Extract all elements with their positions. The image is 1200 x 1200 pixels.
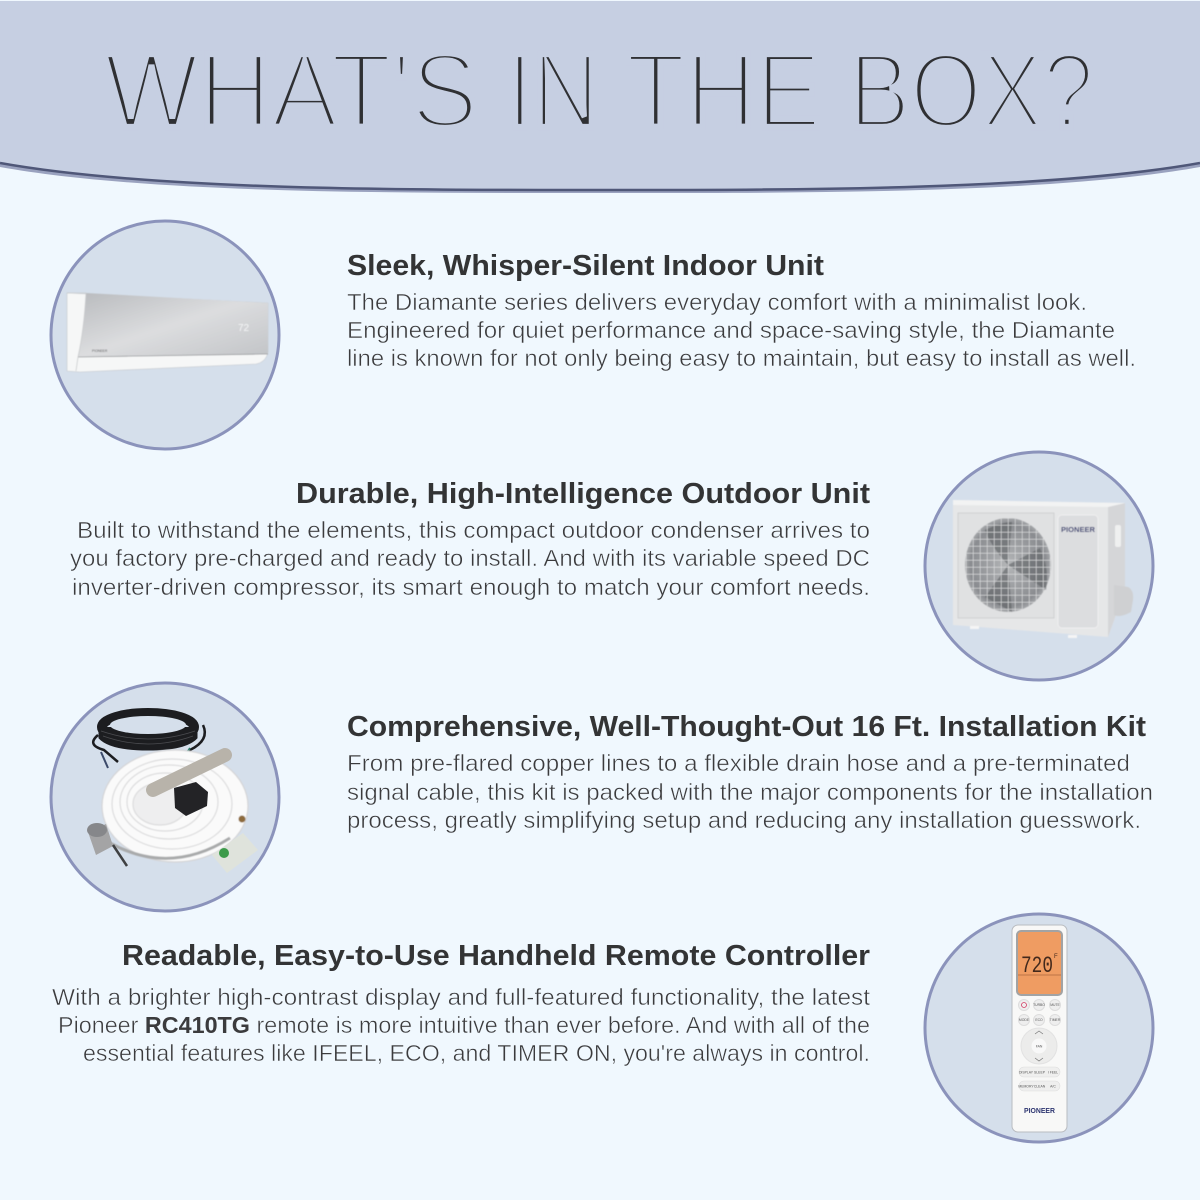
text block: remote controller: [52, 984, 870, 1066]
icon: indoor unit: PIONEER: [92, 349, 108, 353]
icon: grey wall sleeve: [153, 755, 225, 790]
icon: outdoor condenser: PIONEER: [1061, 525, 1096, 534]
icon: remote controller: FAN: [1036, 1044, 1043, 1048]
title: IN: [507, 32, 599, 150]
header banner: [0, 1, 1200, 193]
text block: installation kit: signal cable, this kit is packed with the major components for the installation: [347, 779, 1153, 805]
icon: remote controller: A/C: [1050, 1084, 1056, 1088]
text block: outdoor unit: you factory pre-charged and ready to install. And with its variable speed DC: [70, 545, 870, 571]
icon: indoor unit: [67, 293, 268, 372]
icon: remote controller: ECO: [1035, 1018, 1043, 1022]
title: THE: [626, 32, 821, 150]
icon: outdoor condenser: [953, 500, 1133, 638]
icon: remote controller: DISPLAY: [1019, 1070, 1034, 1074]
text block: remote controller: essential features like IFEEL, ECO, and TIMER ON, you're always in control.: [83, 1040, 870, 1066]
heading: outdoor unit: Durable, High-Intelligence Outdoor Unit: [296, 478, 871, 510]
text block: outdoor unit: inverter-driven compressor, its smart enough to match your comfort needs.: [72, 574, 870, 600]
panel: installation kit image: [51, 683, 279, 911]
text block: indoor unit: [347, 289, 1136, 371]
icon: remote controller: MEMORY: [1018, 1084, 1034, 1088]
icon: remote controller: PIONEER: [1024, 1108, 1055, 1115]
icon: black signal cable coil: [93, 713, 205, 768]
panel: indoor unit image: [51, 221, 279, 449]
icon: remote controller: [1012, 925, 1067, 1132]
icon: indoor unit: 72: [238, 323, 250, 334]
text block: remote controller: Pioneer RC410TG remote is more intuitive than ever before. And with all of the: [58, 1012, 870, 1038]
text block: installation kit: From pre-flared copper lines to a flexible drain hose and a pre-terminated: [347, 750, 1130, 776]
icon: remote controller: CLEAN: [1034, 1084, 1046, 1088]
icon: white insulated line set: [102, 750, 248, 862]
heading: remote controller: Readable, Easy-to-Use Handheld Remote Controller: [122, 940, 870, 972]
panel: outdoor unit image: [925, 452, 1153, 680]
text block: remote controller: With a brighter high-contrast display and full-featured functionality, the latest: [52, 984, 870, 1010]
panel: remote image: [925, 914, 1153, 1142]
title: [104, 32, 1094, 150]
icon: remote controller: MODE: [1019, 1018, 1030, 1022]
text block: outdoor unit: Built to withstand the elements, this compact outdoor condenser arrives to: [77, 517, 870, 543]
icon: black foam block: [174, 782, 208, 816]
heading: installation kit: Comprehensive, Well-Thought-Out 16 Ft. Installation Kit: [347, 711, 1147, 743]
icon: accessory packet: [212, 833, 258, 873]
icon: remote controller: F: [1054, 954, 1058, 960]
icon: grey tape roll: [87, 823, 127, 866]
text block: installation kit: [347, 750, 1153, 833]
icon: remote controller: TIMER: [1050, 1018, 1061, 1022]
icon: remote controller: 720: [1021, 953, 1053, 979]
icon: remote controller: MUTE: [1050, 1003, 1061, 1007]
title: BOX?: [849, 32, 1094, 150]
icon: remote controller: I FEEL: [1048, 1070, 1058, 1074]
icon: remote controller: TURBO: [1033, 1003, 1045, 1007]
text block: indoor unit: line is known for not only being easy to maintain, but easy to install as well.: [347, 345, 1136, 371]
heading: indoor unit: Sleek, Whisper-Silent Indoor Unit: [347, 250, 825, 282]
title: WHAT'S: [104, 32, 478, 150]
text block: outdoor unit: [70, 517, 870, 600]
text block: indoor unit: Engineered for quiet performance and space-saving style, the Diamante: [347, 317, 1115, 343]
text block: installation kit: process, greatly simplifying setup and reducing any installation guesswork.: [347, 807, 1141, 833]
text block: indoor unit: The Diamante series delivers everyday comfort with a minimalist look.: [347, 289, 1087, 315]
icon: remote controller: SLEEP: [1034, 1070, 1046, 1074]
